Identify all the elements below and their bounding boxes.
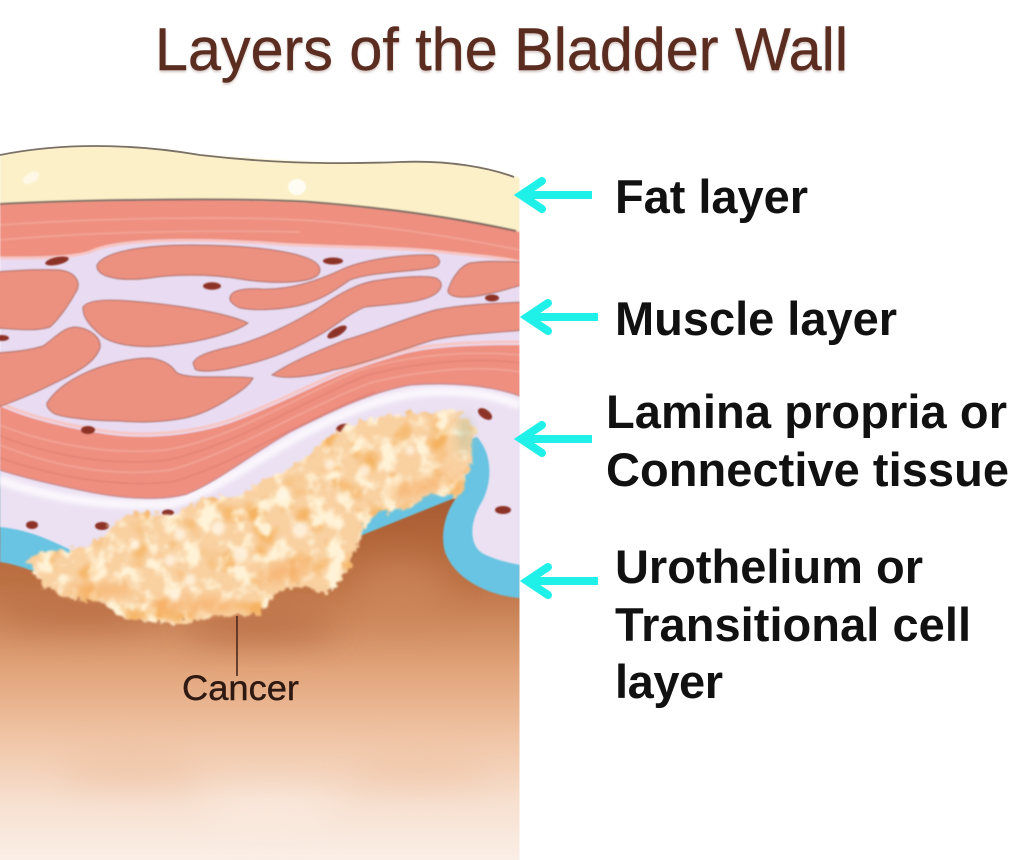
label: urothelium: Transitional cell bbox=[615, 598, 971, 651]
cancer label: Cancer bbox=[182, 669, 299, 708]
label: lamina propria: Connective tissue bbox=[606, 443, 1009, 496]
fat layer bbox=[0, 146, 520, 232]
arrow: muscle layer bbox=[527, 303, 598, 331]
arrow: lamina propria bbox=[521, 425, 592, 453]
label: lamina propria: Lamina propria or bbox=[606, 385, 1007, 438]
label: urothelium: Urothelium or bbox=[615, 540, 923, 593]
muscle layer bbox=[0, 200, 525, 498]
connective tissue between muscle bundles bbox=[0, 240, 520, 437]
tumour shading bbox=[65, 468, 456, 613]
lamina propria bbox=[0, 375, 520, 565]
muscle texture lines bbox=[0, 218, 520, 472]
label: muscle layer: Muscle layer bbox=[615, 292, 897, 345]
bladder lumen bbox=[0, 480, 520, 860]
label: urothelium: layer bbox=[615, 655, 723, 708]
cancer tumour bbox=[28, 412, 475, 623]
arrow: urothelium bbox=[527, 567, 598, 595]
bladder wall illustration bbox=[0, 146, 525, 860]
label: urothelium bbox=[615, 540, 971, 708]
title: Layers of the Bladder Wall bbox=[155, 18, 848, 85]
cancer leader line bbox=[236, 616, 238, 676]
label: fat layer: Fat layer bbox=[615, 170, 808, 223]
muscle bundles bbox=[0, 245, 525, 422]
title: Layers of the Bladder Wall bbox=[155, 16, 848, 83]
label: lamina propria bbox=[606, 385, 1009, 496]
arrow: fat layer bbox=[521, 181, 592, 209]
tumour highlights bbox=[130, 445, 415, 600]
lamina highlight bbox=[0, 392, 520, 505]
urothelium layer bbox=[0, 380, 520, 600]
blood vessels bbox=[0, 255, 511, 530]
